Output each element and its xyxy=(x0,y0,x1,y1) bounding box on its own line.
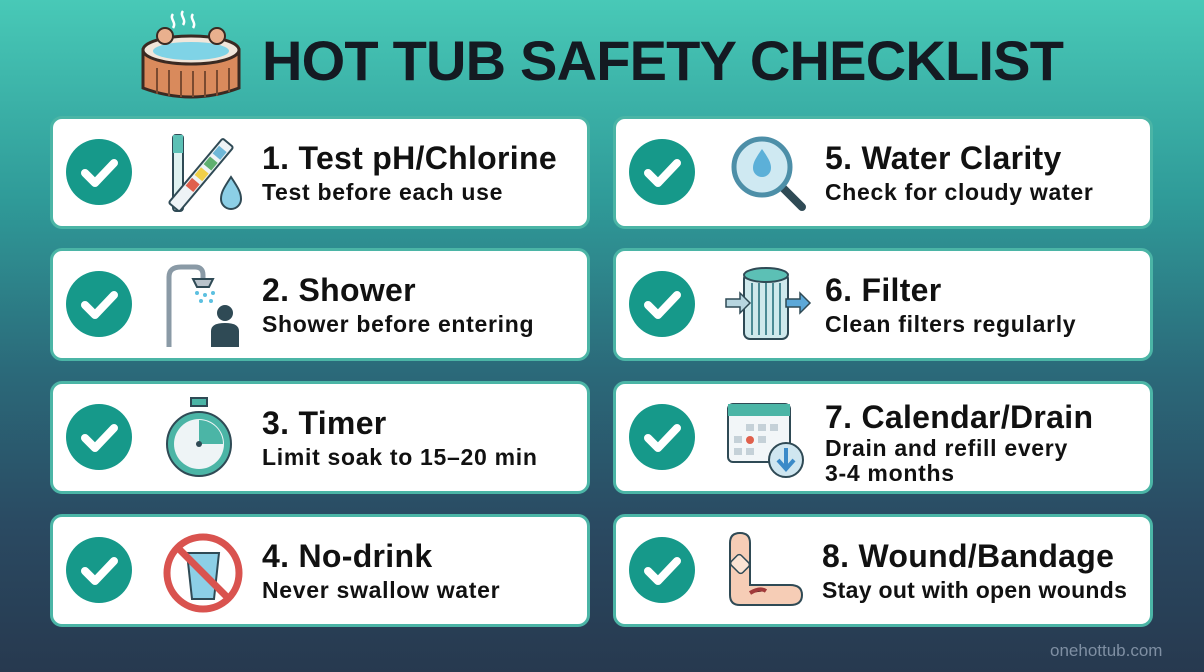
check icon xyxy=(66,404,132,470)
check icon xyxy=(629,139,695,205)
check icon xyxy=(66,139,132,205)
check icon xyxy=(629,404,695,470)
icon: arm bandage xyxy=(729,532,803,606)
card 4 xyxy=(50,514,590,627)
text: 3. Timer xyxy=(262,405,387,441)
card 1 xyxy=(50,116,590,229)
text: 5. Water Clarity xyxy=(825,140,1062,176)
footer: website: onehottub.com xyxy=(1050,641,1162,660)
icon: magnifier xyxy=(732,136,806,211)
text xyxy=(262,538,500,603)
check icon xyxy=(66,537,132,603)
icon: filter xyxy=(725,267,811,340)
title xyxy=(142,10,1064,98)
text: 3-4 months xyxy=(825,460,955,486)
text: Stay out with open wounds xyxy=(822,577,1127,603)
text: Clean filters regularly xyxy=(825,311,1076,337)
card 6 xyxy=(613,248,1153,361)
text: 2. Shower xyxy=(262,272,416,308)
icon: no drink xyxy=(164,534,242,612)
text: 8. Wound/Bandage xyxy=(822,538,1114,574)
icon: shower xyxy=(166,264,239,347)
text xyxy=(262,140,557,205)
card 2 xyxy=(50,248,590,361)
check icon xyxy=(629,271,695,337)
text: 6. Filter xyxy=(825,272,942,308)
text: 4. No-drink xyxy=(262,538,432,574)
text xyxy=(825,272,1076,337)
card 5 xyxy=(613,116,1153,229)
text xyxy=(822,538,1127,603)
text: Limit soak to 15–20 min xyxy=(262,444,538,470)
text: Check for cloudy water xyxy=(825,179,1093,205)
text: 7. Calendar/Drain xyxy=(825,399,1093,435)
title: HOT TUB SAFETY CHECKLIST xyxy=(262,29,1063,92)
text xyxy=(825,399,1093,486)
text xyxy=(262,405,538,470)
icon: hot tub xyxy=(142,10,240,98)
icon: test strip xyxy=(168,134,242,212)
text: Drain and refill every xyxy=(825,435,1068,461)
text: Test before each use xyxy=(262,179,503,205)
card 3 xyxy=(50,381,590,494)
check icon xyxy=(66,271,132,337)
icon: calendar drain xyxy=(727,403,804,478)
icon: timer xyxy=(166,397,232,477)
card 8 xyxy=(613,514,1153,627)
text: Never swallow water xyxy=(262,577,500,603)
check icon xyxy=(629,537,695,603)
text xyxy=(825,140,1093,205)
text xyxy=(262,272,534,337)
text: 1. Test pH/Chlorine xyxy=(262,140,557,176)
card 7 xyxy=(613,381,1153,494)
text: Shower before entering xyxy=(262,311,534,337)
